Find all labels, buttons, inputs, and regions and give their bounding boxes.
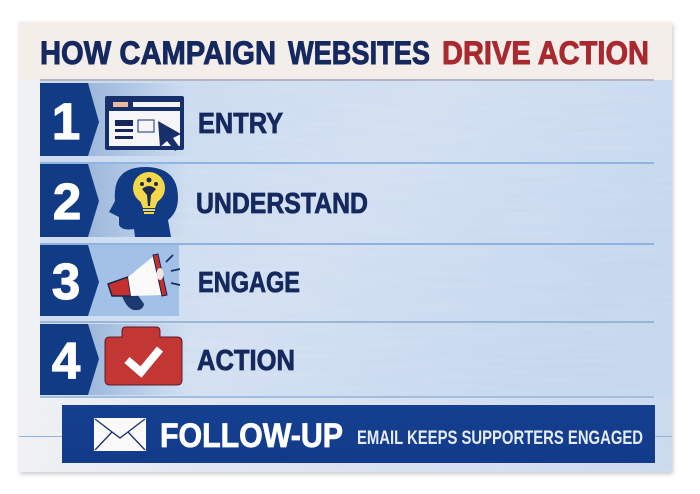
step 1 number tab: 1 (52, 93, 80, 150)
step 2 label: UNDERSTAND (196, 188, 368, 220)
icon: browser window with cursor (105, 96, 184, 151)
title: WEBSITES (288, 35, 430, 71)
title: HOW CAMPAIGN (40, 35, 276, 71)
title: DRIVE ACTION (442, 35, 649, 71)
icon: envelope (94, 418, 146, 451)
step 4 number tab (40, 324, 99, 395)
step 1 number tab (40, 83, 99, 156)
step 2: understand (40, 164, 368, 237)
step 3: engage (40, 245, 300, 316)
step 3 number tab: 3 (52, 253, 80, 310)
icon: head with lightbulb (109, 167, 178, 237)
follow-up heading: FOLLOW-UP (160, 417, 343, 455)
step 3 number tab (40, 245, 99, 316)
step 2 number tab: 2 (53, 173, 81, 230)
icon: red briefcase with check mark (105, 327, 182, 385)
title (40, 35, 649, 71)
step 2 number tab (40, 164, 99, 237)
icon: megaphone (108, 254, 180, 310)
step 4: action (40, 324, 295, 395)
step 1: entry (40, 83, 283, 156)
step 4 number tab: 4 (52, 332, 81, 389)
step 3 label: ENGAGE (198, 267, 300, 299)
step 4 label: ACTION (197, 345, 295, 377)
step 1 label: ENTRY (198, 108, 283, 140)
follow-up banner (62, 405, 655, 463)
